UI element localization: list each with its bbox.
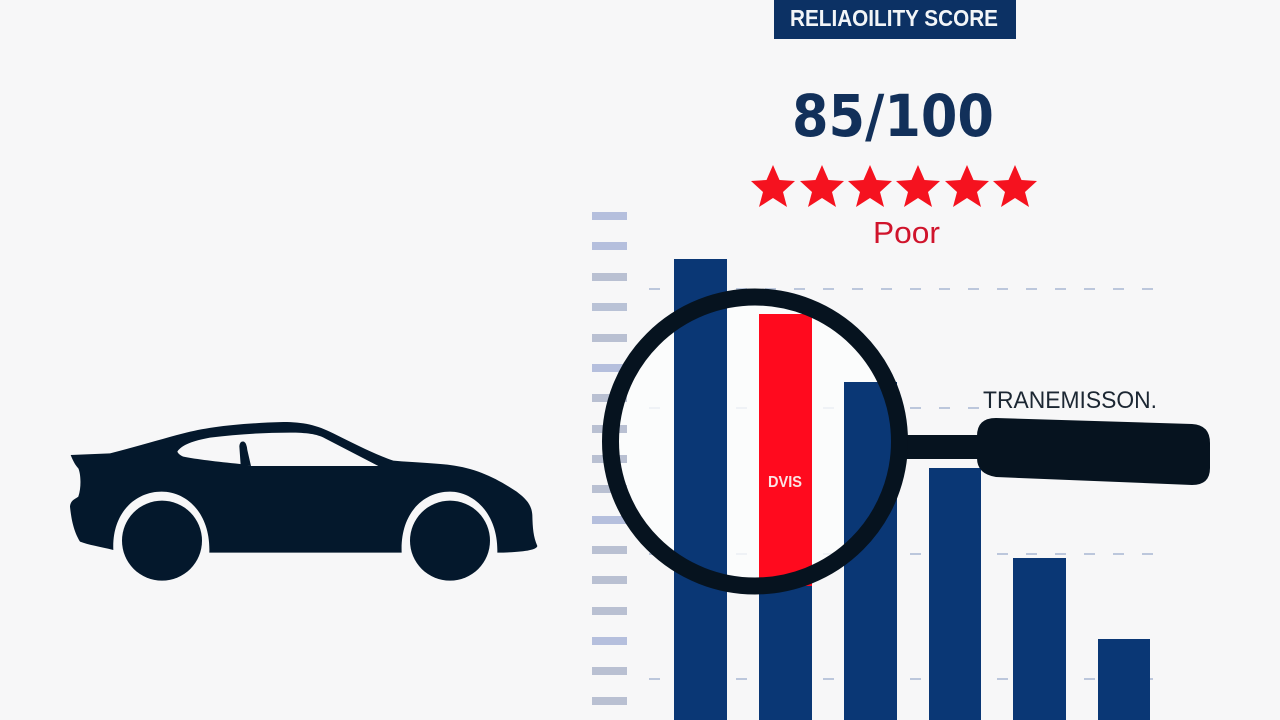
star rating: [751, 165, 1037, 207]
heading banner: RELIAOILITY SCORE: [790, 5, 998, 31]
rating label: Poor: [873, 215, 940, 250]
heading banner: [774, 0, 1016, 39]
bar label: DVIS: [768, 474, 802, 491]
highlighted bar: [759, 314, 812, 586]
grid lines: [649, 289, 1160, 679]
bar chart: [674, 259, 1150, 720]
callout label: TRANEMISSON.: [983, 387, 1157, 414]
score value: 85/100: [792, 82, 994, 150]
lens interior: [615, 302, 895, 582]
icon: magnifying glass: [610, 297, 1210, 586]
icon: car silhouette: [70, 422, 537, 581]
axis tick marks: [592, 212, 627, 705]
